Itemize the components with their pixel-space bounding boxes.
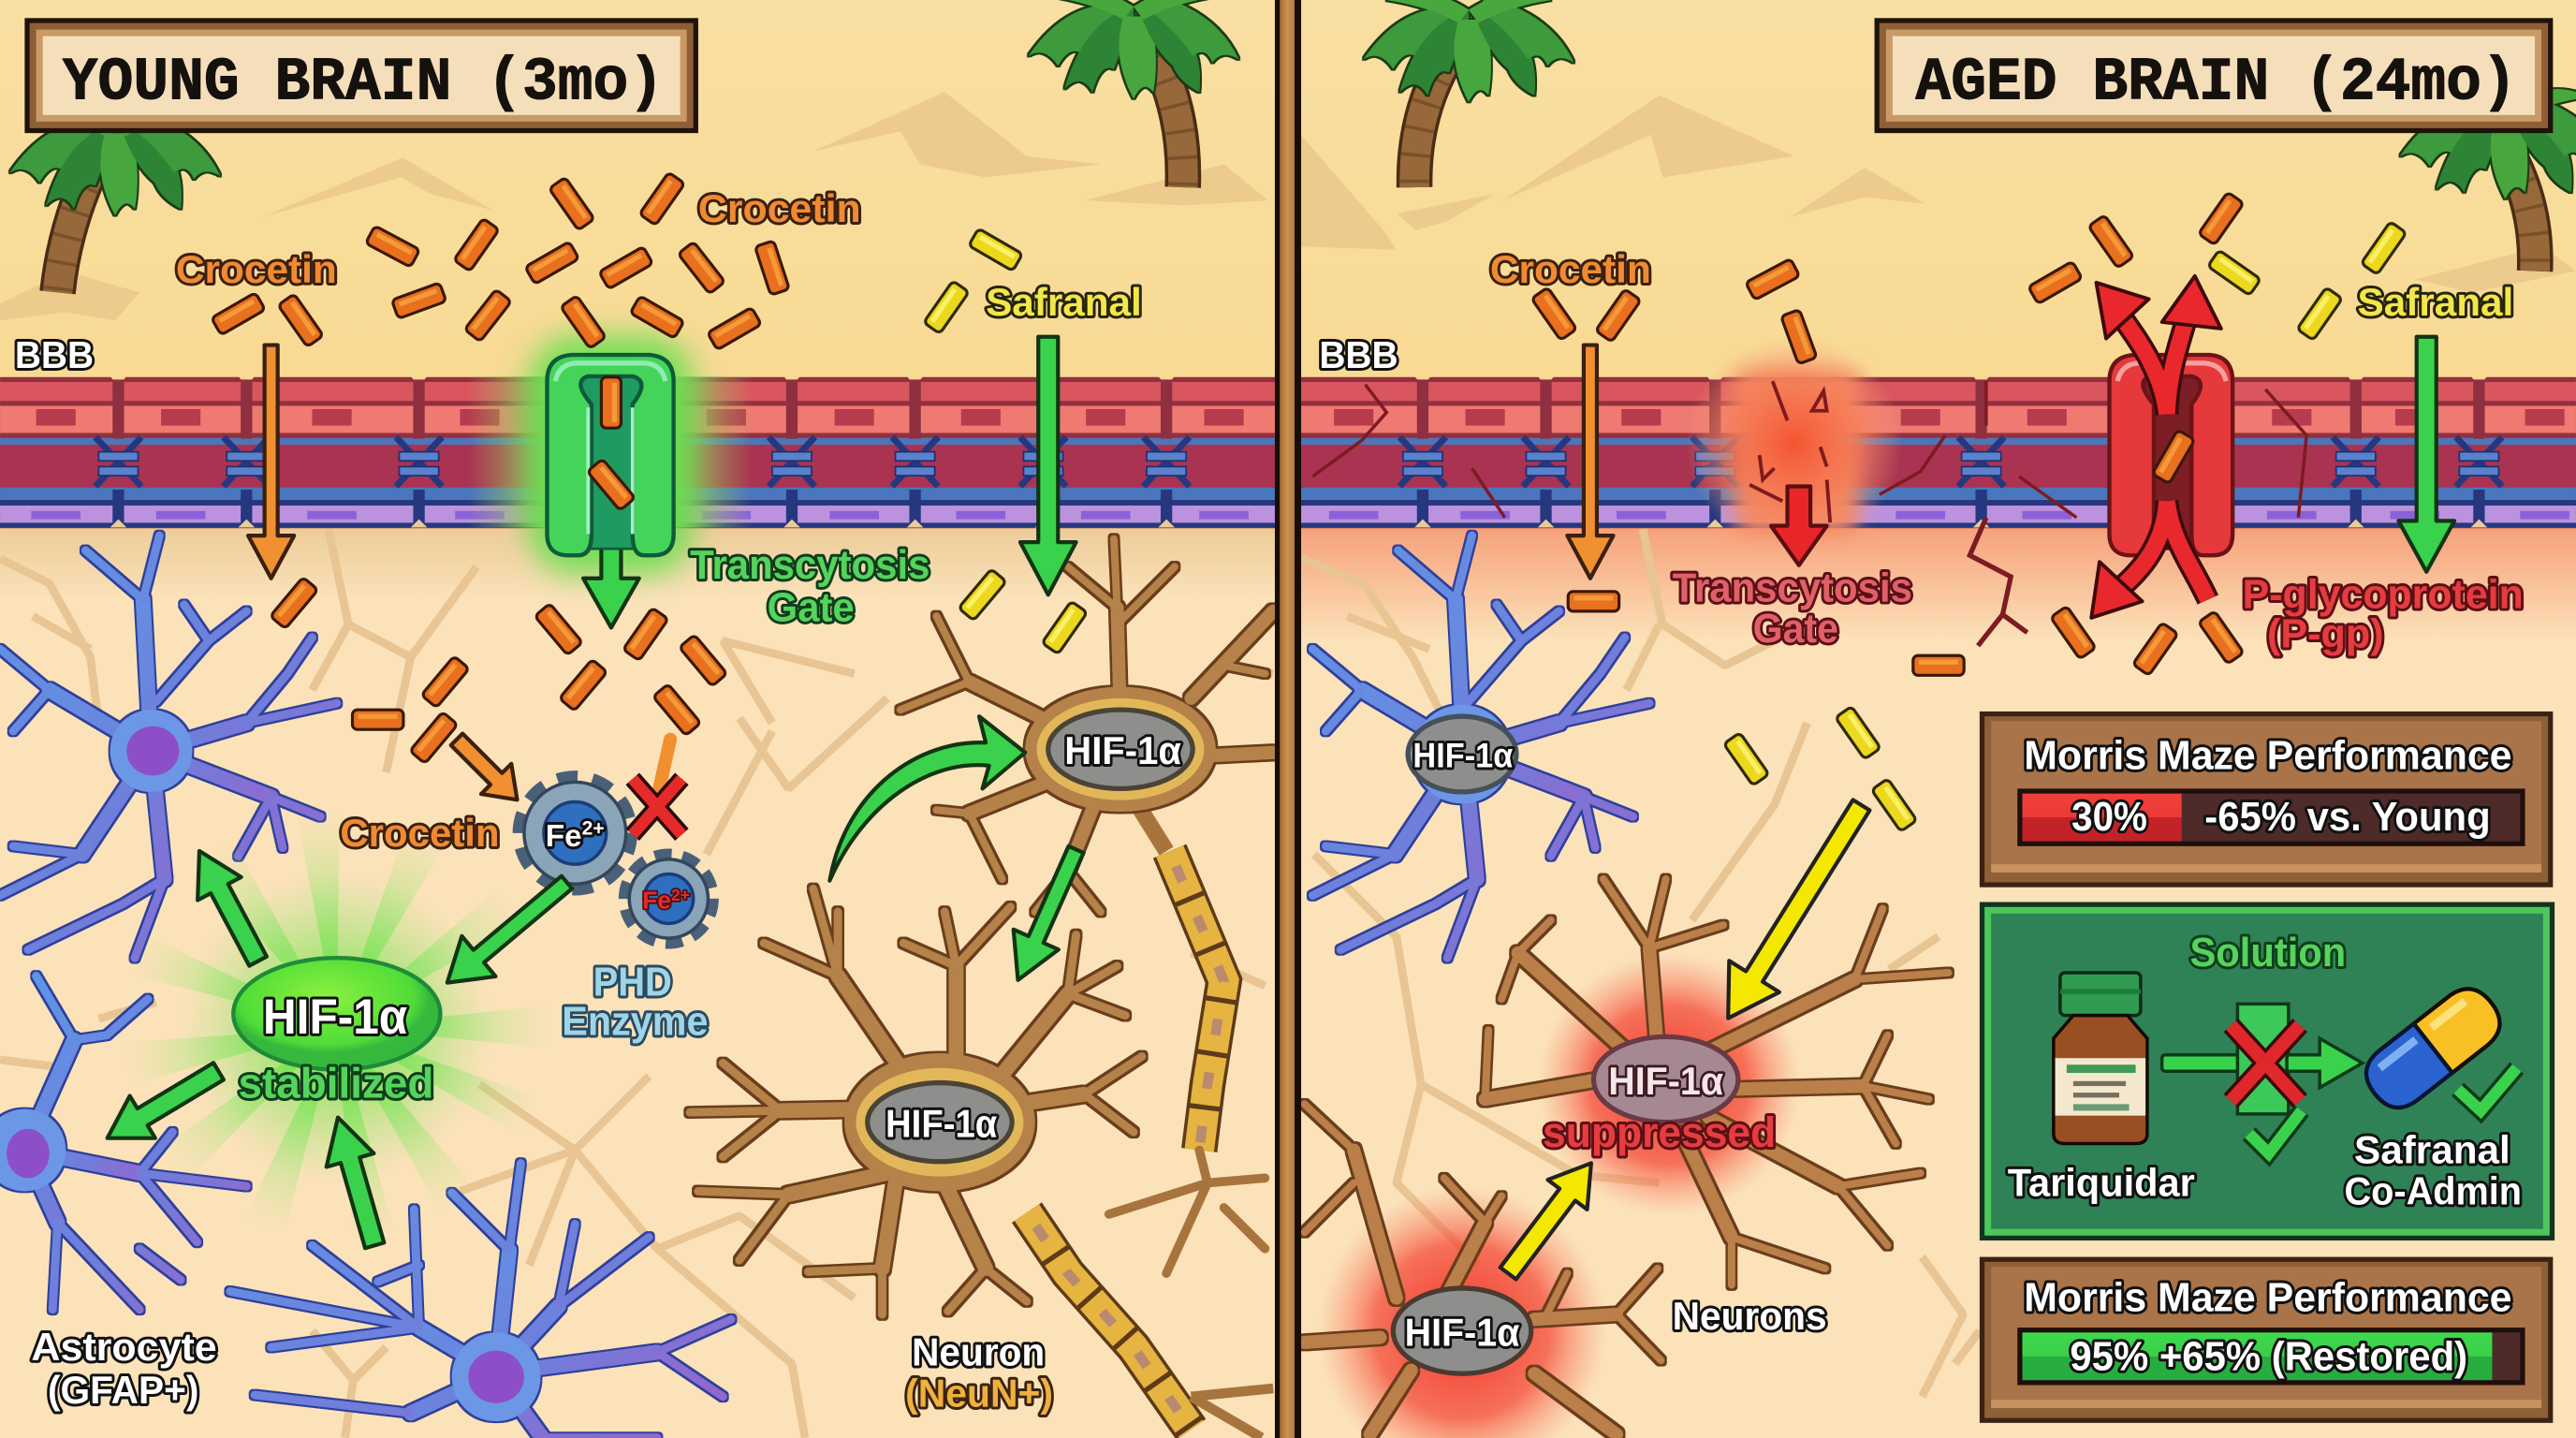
nucleus: HIF-1 alpha grey, young lower neuron: HIF-1α [886, 1101, 997, 1145]
right panel: broken gate glow [1686, 335, 1902, 552]
arrow: orange to gear [442, 725, 533, 814]
nucleus: HIF-1 alpha lower neuron [1393, 1288, 1531, 1373]
label: BBB right: BBB [1319, 333, 1398, 376]
icon: safranal capsule [2355, 978, 2510, 1119]
nucleus: suppressed HIF-1 alpha [1593, 1036, 1738, 1123]
astrocyte: young top left [0, 536, 337, 958]
arrow: yellow to suppressed neuron [1703, 789, 1886, 1034]
label: neurons: Neurons [1673, 1294, 1827, 1338]
nucleus: HIF-1 alpha grey, young upper neuron: HIF-1α [1064, 728, 1181, 772]
panel: morris maze restored [1980, 1257, 2553, 1423]
neuron suppressed: red glow [1538, 953, 1801, 1216]
label: transcytosis gate green: Gate [768, 584, 855, 630]
neuron: young upper right [900, 539, 1273, 912]
label: neuron: (NeuN+) [905, 1371, 1053, 1415]
gear: small: Fe [642, 887, 671, 915]
arrow: HIF to astrocyte left [95, 1050, 231, 1159]
arrow: neuron to neuron [995, 840, 1099, 990]
orange arrow blocked at gear [655, 740, 670, 805]
label: safranal left: Safranal [986, 280, 1142, 324]
gear: large: Fe [546, 819, 582, 854]
neuron lower: dendrites [1305, 1104, 1661, 1434]
crocetin molecules: young [212, 172, 789, 764]
neuron lower: red glow [1318, 1186, 1606, 1438]
label: safranal aged: Safranal [2358, 280, 2513, 324]
arrow: curved to neuron [829, 716, 1025, 881]
icon: check mark right [2458, 1068, 2517, 1110]
gear: small [626, 856, 711, 942]
gear: large: 2+ [582, 818, 605, 840]
neuron suppressed: dendrites [1486, 879, 1949, 1284]
green transcytosis gate [547, 355, 674, 555]
label: crocetin aged: Crocetin [1490, 247, 1651, 291]
neuron: young bottom centre [690, 888, 1142, 1314]
label: transcytosis gate red [1673, 565, 1912, 652]
gear: large [520, 779, 629, 888]
bar: 30%: -65% vs. Young [2204, 794, 2491, 840]
stabilized label: stabilized [239, 1059, 433, 1107]
label: safranal co-admin: Co-Admin [2344, 1168, 2522, 1212]
palm tree: right panel left [1364, 0, 1573, 187]
title: aged brain: AGED BRAIN (24mo) [1915, 49, 2517, 117]
cracks: tissue background pattern [0, 529, 1980, 1438]
label: tariquidar: Tariquidar [2008, 1161, 2195, 1205]
bar: 95% [2017, 1328, 2525, 1385]
label: safranal co-admin: Safranal [2354, 1128, 2510, 1172]
arrow: orange crocetin aged [1567, 345, 1613, 579]
label: crocetin top: Crocetin [698, 186, 861, 230]
label: astrocyte: (GFAP+) [48, 1368, 198, 1412]
bar: 95%: 95% +65% (Restored) [2070, 1334, 2467, 1380]
label: crocetin left: Crocetin [176, 247, 337, 291]
title: aged brain [1875, 18, 2553, 133]
heading: Morris Maze Performance [2024, 1275, 2511, 1321]
label: transcytosis gate red: Transcytosis [1673, 565, 1912, 610]
arrow: astrocyte bottom to HIF [315, 1110, 399, 1253]
membrane tight junctions [31, 376, 2569, 527]
label: crocetin gear: Crocetin [340, 811, 500, 855]
membrane cracks [1312, 381, 2306, 646]
heading: Morris Maze Performance [2024, 732, 2511, 778]
label: neuron [905, 1329, 1053, 1415]
suppressed label: suppressed [1543, 1108, 1776, 1156]
label: astrocyte: Astrocyte [31, 1325, 217, 1369]
background: brain tissue lower zone [0, 526, 2576, 1438]
nucleus: HIF-1 alpha grey, young upper neuron [1048, 710, 1193, 788]
gear: small: 2+ [671, 886, 690, 904]
HIF-1 alpha stabilized burst [123, 813, 550, 1241]
icon: tariquidar bottle [2054, 973, 2147, 1143]
icon: green arrow through blocked pump [2162, 1004, 2363, 1114]
labels: young panel [15, 186, 1142, 1415]
icon: check mark centre [2249, 1110, 2302, 1153]
palm tree: left top [10, 106, 220, 292]
broken gate debris [1749, 381, 1830, 522]
nucleus: HIF-1 alpha in astrocyte: HIF-1α [1412, 737, 1514, 775]
background: desert upper zone [0, 0, 2576, 534]
HIF-1 alpha label: HIF-1α [263, 990, 407, 1045]
panel: morris maze before [1980, 712, 2553, 888]
label: neuron: Neuron [912, 1329, 1045, 1373]
blood brain barrier membrane [0, 376, 2576, 528]
labels: aged panel [1319, 247, 2524, 1338]
arrow: gear to HIF [431, 862, 584, 1003]
label: safranal co-admin [2344, 1128, 2522, 1212]
label: transcytosis gate green: Transcytosis [690, 542, 929, 588]
nucleus: suppressed HIF-1 alpha: HIF-1α [1608, 1059, 1723, 1103]
green HIF-1 alpha cell [233, 958, 440, 1070]
label: P-glycoprotein: (P-gp) [2267, 610, 2384, 656]
crocetin molecules: aged [1531, 192, 2244, 676]
arrows: right panel [1488, 337, 2454, 1288]
nucleus: HIF-1 alpha in astrocyte [1408, 716, 1516, 792]
label: transcytosis gate green [690, 542, 929, 630]
panel: solution [1980, 902, 2554, 1240]
label: PHD enzyme: PHD [593, 960, 672, 1005]
label: PHD enzyme: Enzyme [562, 999, 708, 1045]
label: P-glycoprotein [2243, 571, 2524, 656]
neuron axon: young upper right [1109, 785, 1265, 1273]
bar: 30% [2017, 788, 2525, 846]
arrow: HIF to astrocyte top [178, 840, 280, 973]
arrow: green through gate [583, 529, 639, 627]
label: BBB left: BBB [15, 333, 94, 376]
red X block [633, 779, 681, 835]
nucleus: HIF-1 alpha lower neuron: HIF-1α [1405, 1310, 1520, 1354]
bar: 30%: 30% [2071, 794, 2147, 840]
arrow: red through broken gate [1771, 486, 1827, 565]
red efflux arrows [2091, 276, 2221, 618]
arrow: green safranal [1020, 337, 1076, 594]
safranal molecules: young [924, 228, 1088, 654]
label: astrocyte [31, 1325, 217, 1412]
astrocyte: young left [0, 976, 246, 1310]
title: young brain [24, 18, 698, 133]
nucleus: HIF-1 alpha grey, young lower neuron [868, 1083, 1012, 1162]
palm tree: right panel far right [2400, 89, 2576, 271]
palm tree: left panel right [1029, 0, 1238, 187]
center divider [1275, 0, 1301, 1438]
astrocyte: young bottom [230, 1164, 731, 1438]
green glow around transcytosis gate [468, 335, 753, 575]
dunes and sand shadows [0, 92, 2576, 320]
burst rays [123, 813, 550, 1241]
label: PHD enzyme [562, 960, 708, 1045]
label: P-glycoprotein: P-glycoprotein [2243, 571, 2524, 617]
arrow: green safranal aged [2398, 337, 2454, 572]
safranal molecules: aged [1723, 222, 2407, 831]
arrows: left panel green and orange [95, 337, 1099, 1253]
title: young brain: YOUNG BRAIN (3mo) [63, 49, 664, 117]
PHD enzyme gears [520, 779, 711, 942]
red P-gp efflux pump [2110, 355, 2232, 555]
heading: Solution [2190, 930, 2346, 976]
label: transcytosis gate red: Gate [1753, 606, 1838, 652]
arrow: orange through membrane [248, 345, 294, 579]
arrow: yellow between neurons [1488, 1149, 1611, 1288]
astrocyte: aged [1312, 536, 1649, 958]
neuron axon: young bottom [1027, 1212, 1273, 1438]
